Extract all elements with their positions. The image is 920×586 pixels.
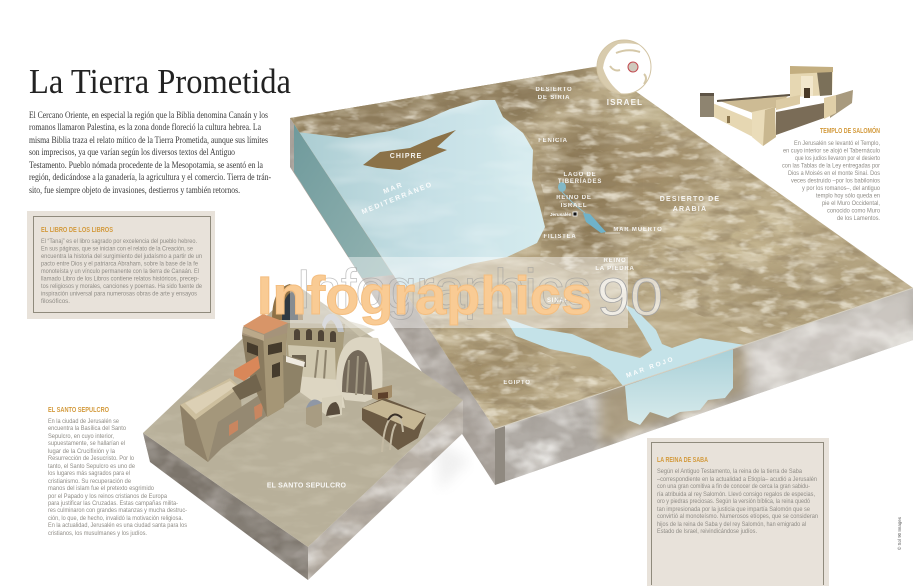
- orange awning: [234, 356, 260, 381]
- map side: left face: [285, 110, 500, 490]
- panel: El Santo Sepulcro text: manos del islam fue el pretexto esgrimido: [48, 485, 155, 492]
- block right face: [305, 398, 465, 583]
- panel: Templo de Salomón: [782, 126, 881, 222]
- panel: La reina de Saba: ría atribuida al rey Salomón. Llevó consigo regalos de especias,: [657, 491, 815, 498]
- panel: El libro de los libros: El “Tanaj” es el libro sagrado por excelencia del pueblo hebreo.: [41, 238, 197, 245]
- Sea of Galilee: [558, 182, 566, 192]
- map top surface: [285, 60, 920, 435]
- map labels: DE SIRIA: [538, 95, 570, 101]
- panel: Templo de Salomón: En Jerusalén se levantó el Templo,: [794, 140, 880, 147]
- intro text: sito, fue siempre objeto de invasiones, destierros y también retornos.: [29, 185, 240, 196]
- watermark text: [257, 257, 663, 327]
- mountain relief: [292, 66, 904, 335]
- dome arch: [322, 314, 344, 332]
- watermark text: Infographics: [257, 266, 592, 326]
- map labels: Jerusalén: [550, 212, 572, 217]
- panel: El libro de los libros: [27, 211, 215, 319]
- map labels: TIBERÍADES: [558, 177, 602, 185]
- map labels: DESIERTO DE: [660, 196, 720, 203]
- rear gallery: [287, 323, 345, 382]
- panel: El Santo Sepulcro text: En la ciudad de Jerusalén se: [48, 418, 119, 425]
- credit: © Sol 90 Images: [896, 516, 902, 550]
- panel: La reina de Saba: oro y piedras preciosas. Según la versión bíblica, la reina quedó: [657, 498, 810, 505]
- map labels: FENICIA: [538, 138, 568, 144]
- panel: El libro de los libros: inspiración universal para numerosas obras de arte y ensayos: [41, 290, 197, 298]
- panel: El Santo Sepulcro text: Sepulcro, en cuyo interior,: [48, 433, 114, 440]
- panel: La reina de Saba: –correspondiente en la actualidad a Etiopía– acudió a Jerusalén: [657, 476, 818, 483]
- map labels: [360, 87, 720, 386]
- panel: El Santo Sepulcro text: por el Papado y los reinos cristianos de Europa: [48, 493, 168, 500]
- intro text: [29, 110, 271, 196]
- map labels: MAR MUERTO: [613, 227, 663, 233]
- intro text: son imprecisos, ya que varían según los diversos textos del Antiguo: [29, 147, 235, 158]
- panel: El Santo Sepulcro text: En la actualidad, Jerusalén es una ciudad santa para los: [48, 522, 187, 529]
- map labels: REINO: [603, 258, 627, 264]
- island: Cyprus: [363, 130, 456, 170]
- panel: Templo de Salomón: de los Lamentos.: [837, 215, 880, 222]
- panel: Templo de Salomón: pie el Muro Occidental,: [822, 200, 880, 207]
- relief map block: [285, 60, 920, 490]
- panel: El Santo Sepulcro text: ción, lo que, de hecho, invalidó la motivación religiosa.: [48, 515, 183, 522]
- intro text: misma Biblia traza el relato mítico de la Tierra Prometida, aunque sus límites: [29, 135, 268, 146]
- panel: La reina de Saba: con una gran comitiva a fin de conocer de cerca la gran sabidu-: [657, 483, 810, 490]
- watermark text: Infographics: [296, 257, 591, 320]
- panel: El Santo Sepulcro text: supuestamente, se hallarían el: [48, 440, 125, 447]
- map labels: MEDITERRÁNEO: [360, 179, 434, 216]
- map labels: DESIERTO: [536, 87, 572, 93]
- panel: Templo de Salomón: TEMPLO DE SALOMÓN: [820, 126, 880, 135]
- panel: Templo de Salomón: con las Tablas de la Ley entregadas por: [782, 162, 880, 170]
- panel: Templo de Salomón: que los judíos llevaron por el desierto: [795, 155, 880, 162]
- panel: El Santo Sepulcro text: [48, 407, 187, 537]
- panel: La reina de Saba: Estado de Israel, reivindicándose judíos.: [657, 528, 757, 535]
- map labels: MAR ROJO: [625, 356, 676, 380]
- Red Sea: [505, 304, 745, 386]
- block left face: [140, 430, 310, 585]
- panel: El libro de los libros: encuentra la historia del surgimiento del judaísmo a partir de un: [41, 253, 203, 260]
- panel: La reina de Saba: convirtió al monoteísmo. Numerosos etíopes, que se consideran: [657, 513, 819, 520]
- panel: El libro de los libros: llamado Libro de los Libros contiene relatos históricos, precep-: [41, 276, 199, 282]
- sea: Mediterranean: [300, 100, 545, 286]
- panel: La reina de Saba: Según el Antiguo Testamento, la reina de la tierra de Saba: [657, 468, 803, 475]
- map labels: LAGO DE: [564, 172, 596, 178]
- right-side market shed: [362, 398, 426, 450]
- panel: El Santo Sepulcro text: encuentra la Basílica del Santo: [48, 425, 127, 432]
- panel: El Santo Sepulcro text: res culminaron con grandes matanzas y mucha destruc-: [48, 507, 187, 514]
- panel: El libro de los libros: monoteísta y un vínculo permanente con la tierra de Canaán. El: [41, 268, 199, 275]
- map labels: LA PIEDRA: [595, 266, 635, 272]
- map labels: CHIPRE: [390, 153, 422, 160]
- map labels: EGIPTO: [503, 380, 531, 386]
- map labels: ISRAEL: [561, 203, 587, 209]
- label: EL SANTO SEPULCRO: [267, 482, 347, 490]
- small domed chapel: [306, 402, 322, 428]
- map shadow: [435, 440, 470, 490]
- intro text: Testamento. Pueblo nómada procedente de la Mesopotamia, se asentó en la: [29, 160, 264, 171]
- rear dome: [272, 284, 303, 320]
- Egypt relief: [424, 312, 612, 426]
- panel: La reina de Saba: LA REINA DE SABA: [657, 457, 708, 464]
- map edge highlight: [495, 288, 913, 429]
- map labels: REINO DE: [556, 195, 592, 201]
- panel: El Santo Sepulcro text: para justificar las Cruzadas. Estas campañas milita-: [48, 500, 178, 507]
- left wing: [180, 378, 242, 462]
- panel: El Santo Sepulcro text: los lugares más sagrados para el: [48, 470, 130, 477]
- title: La Tierra Prometida: [29, 62, 291, 101]
- main tower: [242, 328, 287, 417]
- watermark text: 90: [597, 268, 663, 327]
- panel: Templo de Salomón: templo hoy sólo queda en: [816, 192, 880, 200]
- panel: Templo de Salomón: en cuyo interior se alojó el Tabernáculo: [783, 148, 881, 154]
- panel: El libro de los libros: pacto entre Dios y el patriarca Abraham, sobre la base de la fe: [41, 260, 198, 268]
- map labels: SINAÍ: [547, 296, 567, 304]
- illustration: Temple of Solomon: [700, 66, 853, 146]
- panel: El Santo Sepulcro text: Resurrección de Jesucristo. Por lo: [48, 455, 135, 462]
- panel: Templo de Salomón: Dios a Moisés en el monte Sinaí. Dos: [788, 170, 880, 177]
- intro text: romanos llamaron Palestina, es la zona donde floreció la cultura hebrea. La: [29, 122, 262, 133]
- rotunda cutaway: [336, 337, 382, 402]
- panel: El Santo Sepulcro text: cristianos, los musulmanes y los judíos.: [48, 530, 147, 537]
- panel: La reina de Saba: tan impresionada por la justicia que impartía Salomón que se: [657, 506, 810, 513]
- panel: El libro de los libros: filosóficos.: [41, 298, 70, 305]
- map labels: ARABIA: [673, 206, 707, 213]
- illustration: Santo Sepulcro block: [140, 284, 465, 585]
- map labels: MAR: [383, 181, 404, 196]
- courtyard: [285, 375, 345, 408]
- block top: [143, 286, 463, 547]
- map side: front right face: [490, 285, 915, 490]
- panel: El Santo Sepulcro text: tanto, el Santo Sepulcro es uno de: [48, 463, 136, 470]
- terrain colour zones: [290, 67, 596, 138]
- panel: Templo de Salomón: veces destruido –por los babilonios: [791, 178, 880, 184]
- Dead Sea: [583, 213, 606, 233]
- panel: El libro de los libros: EL LIBRO DE LOS LIBROS: [41, 227, 113, 234]
- panel: El Santo Sepulcro text: lugar de la Crucifixión y la: [48, 448, 116, 455]
- icon: globe locator: ISRAEL: [607, 98, 643, 107]
- watermark band: [290, 257, 628, 328]
- panel: El Santo Sepulcro text: cristianismo. Su recuperación de: [48, 478, 132, 485]
- panel: Templo de Salomón: conocido como Muro: [827, 208, 881, 214]
- side chapels: [372, 385, 392, 402]
- intro text: El Cercano Oriente, en especial la región que la Biblia denomina Canaán y los: [29, 110, 268, 121]
- panel: Templo de Salomón: y por los romanos–, del antiguo: [802, 185, 880, 192]
- panel: La reina de Saba: hijos de la reina de Saba y del rey Salomón, han emigrado al: [657, 521, 806, 528]
- panel: El libro de los libros: tos religiosos y morales, canciones y poemas. Ha sido fuente de: [41, 283, 203, 290]
- intro text: región, dedicándose a la ganadería, la agricultura y el comercio. Tierra de trán-: [29, 172, 271, 183]
- panel: El libro de los libros: En sus páginas, que se inician con el relato de la Creación, se: [41, 246, 193, 252]
- panel: El Santo Sepulcro text: EL SANTO SEPULCRO: [48, 407, 109, 414]
- map labels: FILISTEA: [543, 234, 577, 240]
- panel: La reina de Saba: [647, 438, 829, 586]
- icon: globe locator: [597, 40, 651, 107]
